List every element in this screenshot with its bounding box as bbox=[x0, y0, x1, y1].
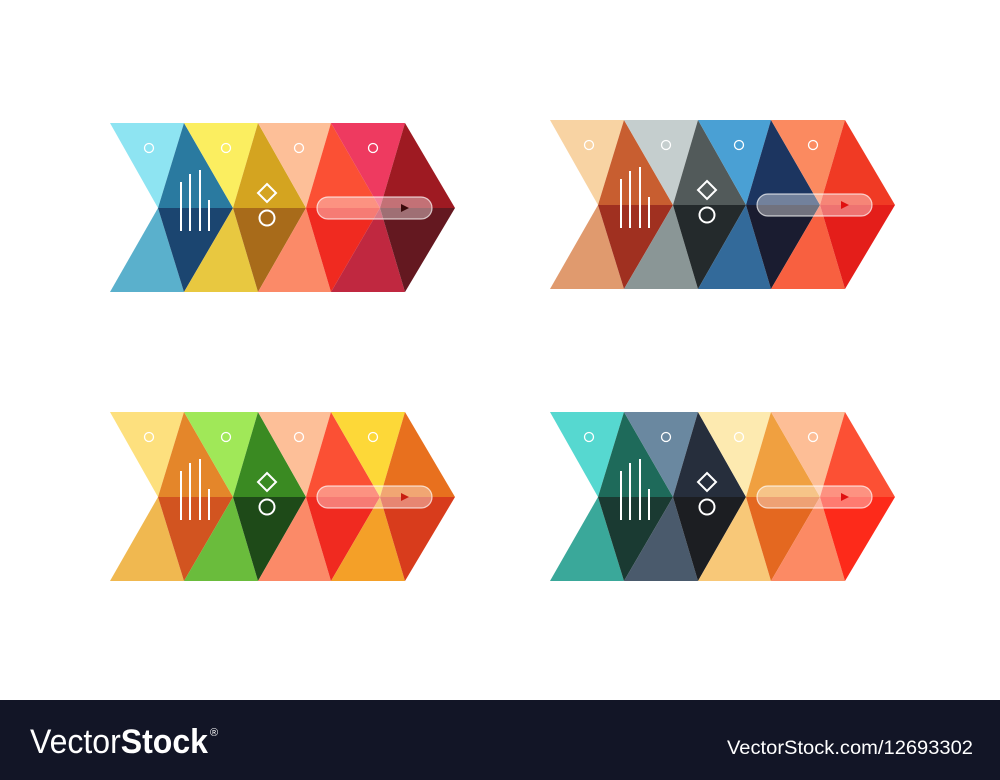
icon: diamond and circle bbox=[258, 473, 276, 514]
icons: small circles bbox=[144, 432, 378, 442]
icon: bar chart bbox=[181, 459, 209, 520]
arrow infographic 3 (bottom-left) bbox=[110, 412, 455, 581]
arrow infographic 2 (top-right) bbox=[550, 120, 895, 289]
pill button bbox=[317, 486, 432, 508]
footer logo: VectorStock bbox=[30, 723, 208, 761]
pill button bbox=[757, 486, 872, 508]
arrow infographic 4 (bottom-right) bbox=[550, 412, 895, 581]
icon: diamond and circle bbox=[698, 473, 716, 514]
pill button bbox=[317, 197, 432, 219]
icons: small circles bbox=[584, 432, 818, 442]
icon: diamond and circle bbox=[698, 181, 716, 222]
footer bar bbox=[0, 700, 1000, 780]
icon: bar chart bbox=[621, 459, 649, 520]
icon: bar chart bbox=[621, 167, 649, 228]
icons: small circles bbox=[144, 144, 378, 152]
footer url: VectorStock.com/12693302 bbox=[727, 738, 973, 759]
icon: bar chart bbox=[181, 170, 209, 231]
pill button bbox=[757, 194, 872, 216]
registered mark: ® bbox=[210, 727, 218, 739]
icon: diamond and circle bbox=[258, 184, 276, 226]
arrow infographic 1 (top-left) bbox=[110, 123, 455, 292]
icons: small circles bbox=[584, 140, 818, 150]
